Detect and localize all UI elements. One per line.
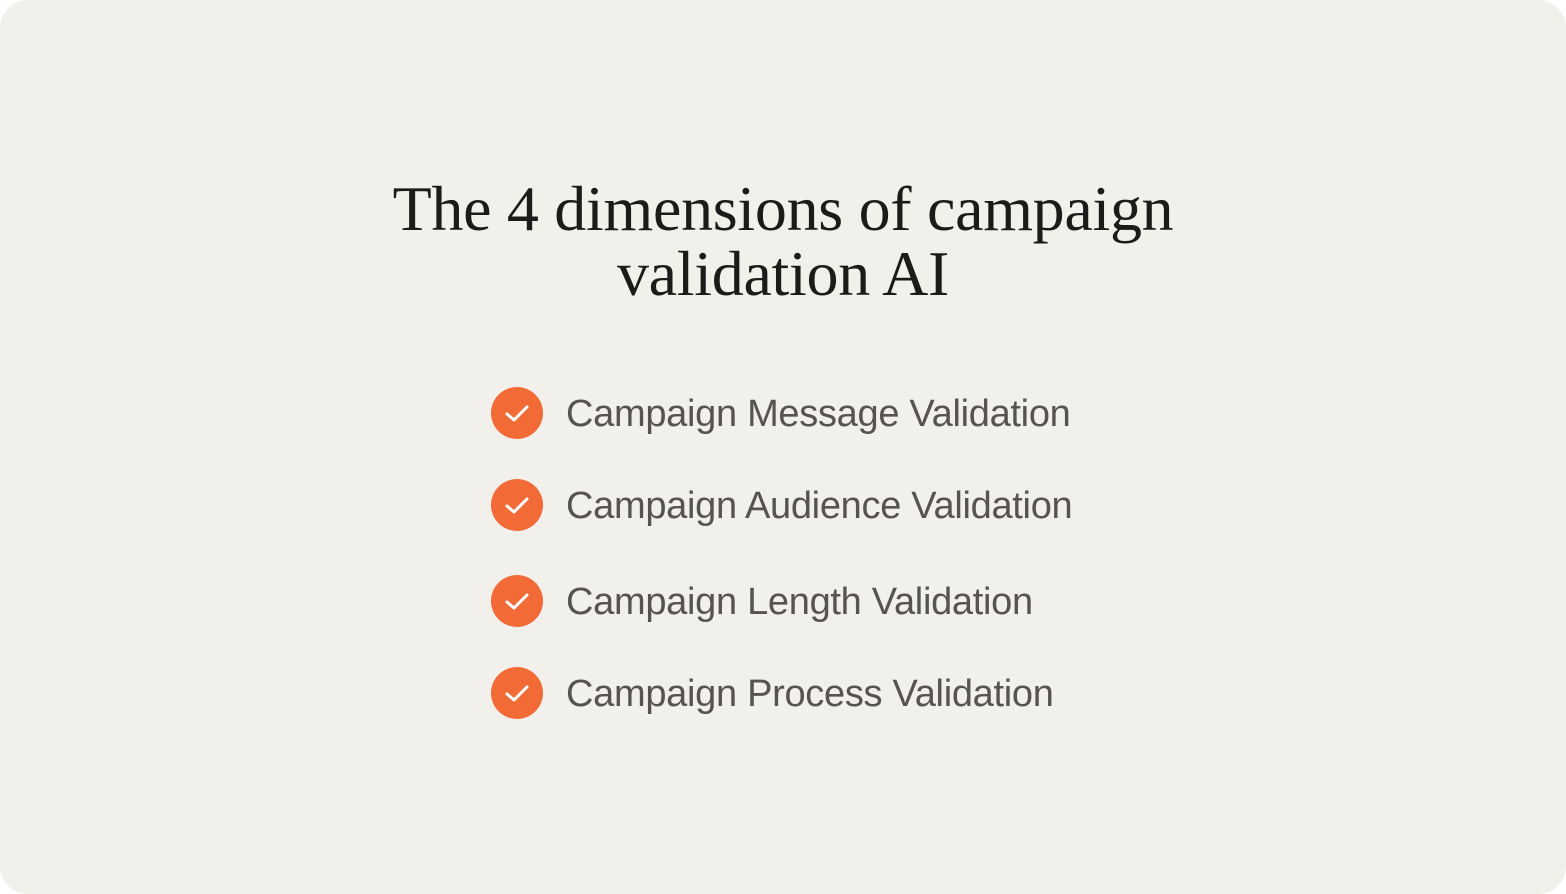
title [393,173,1173,309]
title: The 4 dimensions of campaign [393,173,1173,244]
icon: check circle [491,667,543,719]
icon: check circle [491,479,543,531]
item: length validation [491,575,1033,627]
label: Campaign Message Validation [566,393,1070,435]
item: process validation [491,667,1054,719]
label: Campaign Length Validation [566,581,1033,623]
label: Campaign Process Validation [566,673,1054,715]
label: Campaign Audience Validation [566,485,1072,527]
title: validation AI [617,238,949,309]
icon: check circle [491,575,543,627]
item: audience validation [491,479,1072,531]
icon: check circle [491,387,543,439]
item: message validation [491,387,1070,439]
